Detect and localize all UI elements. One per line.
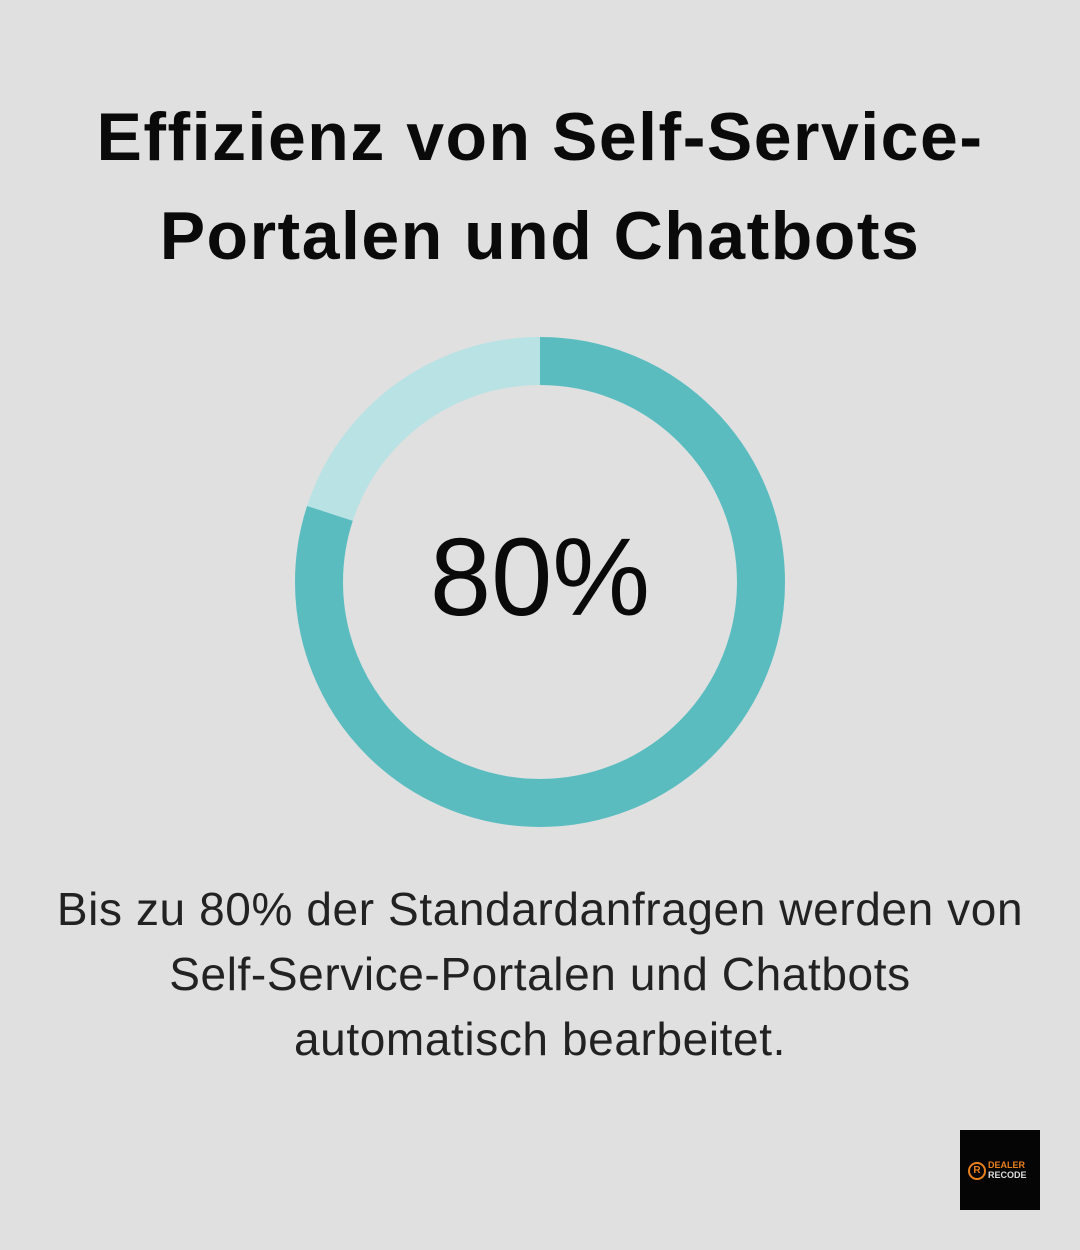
logo icon: [968, 1162, 986, 1180]
description text: [57, 883, 1023, 1065]
title: Effizienz von Self-Service-: [97, 99, 983, 175]
description text: Self-Service-Portalen und Chatbots: [169, 948, 911, 1000]
logo icon: R: [973, 1165, 981, 1176]
logo: [960, 1130, 1040, 1210]
80% segment: [319, 361, 761, 803]
logo text: RECODE: [988, 1170, 1027, 1180]
remaining 20% segment: [319, 361, 761, 803]
center value: 80%: [430, 516, 650, 639]
logo text: [988, 1160, 1027, 1180]
description text: Bis zu 80% der Standardanfragen werden von: [57, 883, 1023, 935]
title: Portalen und Chatbots: [160, 198, 920, 274]
title: [97, 99, 983, 274]
logo text: DEALER: [988, 1160, 1025, 1170]
description text: automatisch bearbeitet.: [294, 1013, 786, 1065]
